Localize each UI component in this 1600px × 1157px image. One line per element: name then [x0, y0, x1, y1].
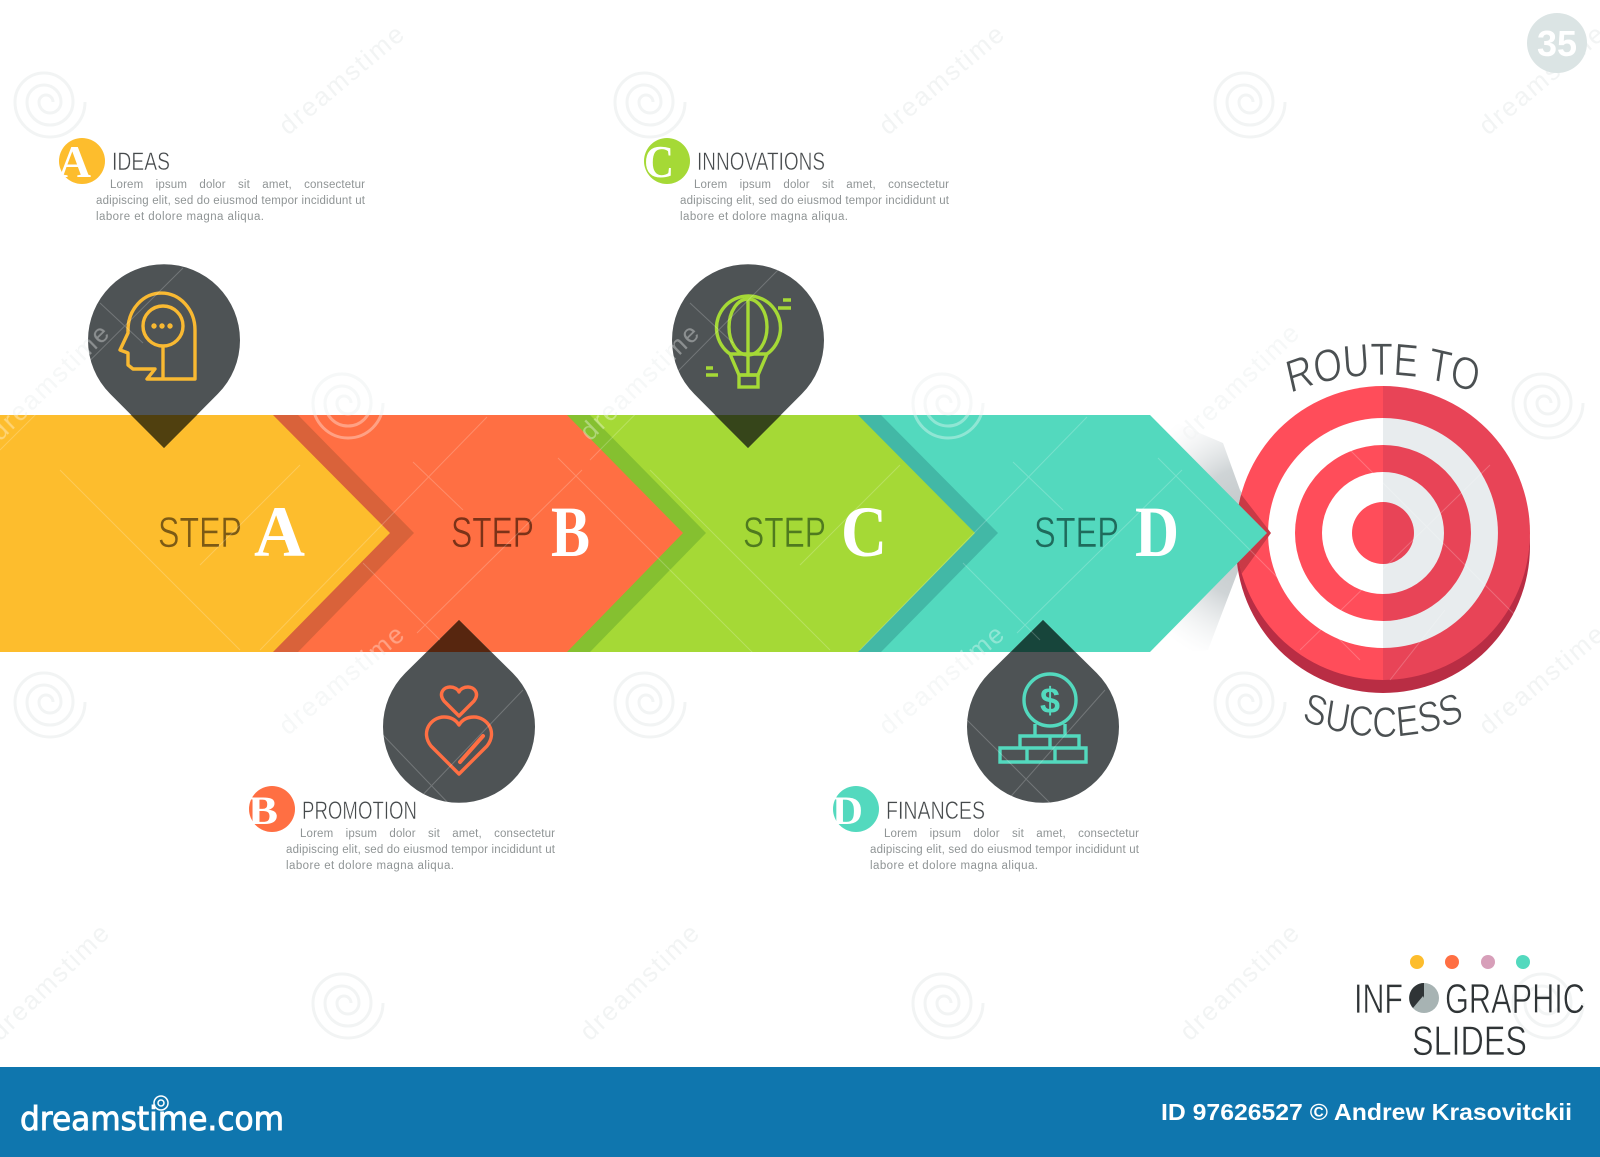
- icon: hearts: [426, 687, 492, 774]
- watermark spirals and text, grey layer: dreamstime: [573, 316, 706, 446]
- text block B: labore et dolore magna aliqua.: [286, 860, 454, 872]
- watermark spirals and text, grey layer: dreamstime: [573, 916, 706, 1046]
- badge D: [832, 786, 879, 833]
- watermark overlay, white layer: dreamstime: [873, 617, 1011, 741]
- logo word: slides: SLIDES: [1412, 1017, 1527, 1064]
- step C label: C: [841, 492, 887, 572]
- arrow: step B: [0, 415, 683, 652]
- watermark spirals and text, grey layer: dreamstime: [273, 17, 411, 141]
- pin D with coin icon: [967, 620, 1119, 803]
- text block A: labore et dolore magna aliqua.: [96, 211, 264, 223]
- panel: D finances: [832, 786, 1140, 872]
- icon: head with idea: [120, 293, 195, 379]
- text block B: [286, 828, 556, 872]
- pin B with hearts icon: [383, 620, 535, 803]
- watermark overlay, white layer: [0, 268, 1530, 805]
- heading: promotion: PROMOTION: [302, 797, 417, 825]
- arrow: step C: [0, 415, 975, 652]
- pin A with head icon: [88, 264, 240, 448]
- watermark overlay, white layer: dreamstime: [573, 316, 706, 446]
- footer site name: dreamstime.com: [20, 1099, 284, 1138]
- text block C: labore et dolore magna aliqua.: [680, 211, 848, 223]
- heading: ideas: IDEAS: [112, 148, 170, 176]
- text block C: [680, 179, 950, 223]
- text block D: labore et dolore magna aliqua.: [870, 860, 1038, 872]
- arrow drop shadow: [1150, 412, 1267, 656]
- arrow band: four chevrons: [0, 415, 1267, 652]
- text block B: adipiscing elit, sed do eiusmod tempor incididunt ut: [286, 844, 556, 856]
- step A label: A: [254, 492, 305, 572]
- target with rings: [1230, 386, 1530, 693]
- heading: innovations: INNOVATIONS: [697, 148, 825, 176]
- watermark spirals and text, grey layer: dreamstime: [1173, 316, 1306, 446]
- text block C: Lorem ipsum dolor sit amet, consectetur: [694, 179, 949, 191]
- step A label: STEP: [158, 509, 242, 557]
- text block C: adipiscing elit, sed do eiusmod tempor incididunt ut: [680, 195, 950, 207]
- text block A: adipiscing elit, sed do eiusmod tempor incididunt ut: [96, 195, 366, 207]
- curved title: success: SUCCESS: [1304, 694, 1462, 737]
- watermark overlay, white layer: dreamstime: [273, 617, 411, 741]
- step B label: B: [551, 492, 590, 572]
- logo pie icon: [1409, 983, 1439, 1013]
- badge B: B: [248, 788, 278, 833]
- icon: coin on bricks: [1000, 674, 1086, 762]
- panel: B promotion: [248, 786, 556, 872]
- panel: C innovations: [644, 136, 950, 223]
- badge D: D: [832, 788, 863, 833]
- panel: A ideas: [58, 136, 366, 223]
- arrow: step D: [0, 415, 1267, 652]
- text block D: Lorem ipsum dolor sit amet, consectetur: [884, 828, 1139, 840]
- text block D: adipiscing elit, sed do eiusmod tempor incididunt ut: [870, 844, 1140, 856]
- step D label: [1034, 492, 1179, 572]
- watermark spirals and text, grey layer: dreamstime: [873, 17, 1011, 141]
- logo word: inf: INF: [1354, 975, 1403, 1022]
- badge B: [248, 786, 295, 833]
- text block A: Lorem ipsum dolor sit amet, consectetur: [110, 179, 365, 191]
- watermark overlay, white layer: dreamstime: [1173, 316, 1306, 446]
- legend dots: [1410, 955, 1530, 969]
- badge C: C: [644, 136, 674, 187]
- footer credit: ID 97626527 © Andrew Krasovitckii: [1161, 1099, 1572, 1125]
- text block D: [870, 828, 1140, 872]
- step B label: [451, 492, 590, 572]
- text block A: [96, 179, 366, 223]
- badge A: A: [58, 136, 91, 187]
- step B label: STEP: [451, 509, 534, 557]
- text block B: Lorem ipsum dolor sit amet, consectetur: [300, 828, 555, 840]
- page number badge: [1527, 13, 1587, 73]
- step C label: [743, 492, 887, 572]
- step D label: D: [1135, 492, 1179, 572]
- footer logo spiral: [154, 1096, 168, 1110]
- curved title: route to: ROUTE TO: [1286, 344, 1478, 392]
- watermark spirals and text, grey layer: dreamstime: [273, 617, 411, 741]
- heading: finances: FINANCES: [886, 797, 985, 825]
- icon: coin on bricks: $: [1040, 680, 1060, 721]
- step C label: STEP: [743, 509, 826, 557]
- watermark spirals and text, grey layer: dreamstime: [873, 617, 1011, 741]
- step A label: [158, 492, 305, 572]
- step D label: STEP: [1034, 509, 1119, 557]
- watermark spirals and text, grey layer: dreamstime: [1173, 916, 1306, 1046]
- page number badge: 35: [1537, 23, 1577, 64]
- icon: hot air balloon: [706, 296, 791, 387]
- logo: infographic slides: [1354, 955, 1585, 1064]
- arrow: step A: [0, 415, 390, 652]
- pin C with balloon icon: [672, 264, 824, 448]
- footer bar: [0, 1067, 1600, 1157]
